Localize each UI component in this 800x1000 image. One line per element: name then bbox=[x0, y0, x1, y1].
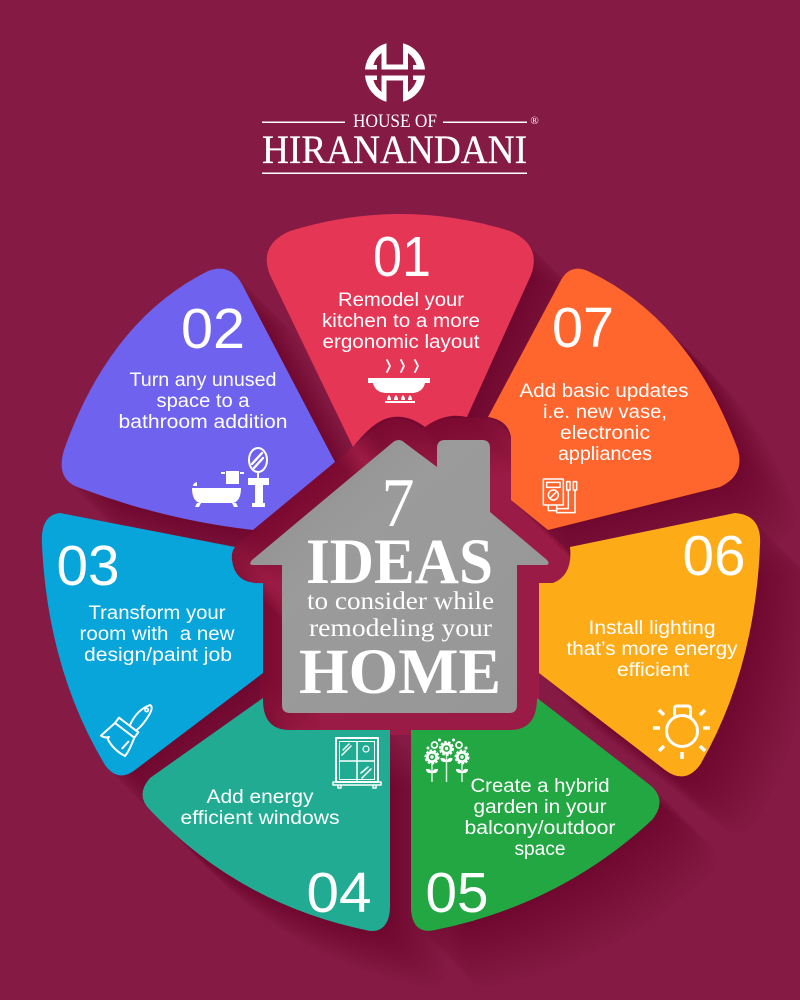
title: to consider while bbox=[307, 588, 494, 615]
title: IDEAS bbox=[306, 526, 493, 598]
segment 05: garden: Create a hybrid bbox=[470, 776, 610, 797]
logo: ® bbox=[530, 115, 539, 127]
title: 7 bbox=[382, 465, 414, 542]
icon: bathtub and sink bbox=[192, 448, 269, 507]
segment 05: garden: garden in your bbox=[474, 797, 607, 818]
segment 02: bathroom: space to a bbox=[156, 391, 250, 412]
segment 02: bathroom: Turn any unused bbox=[130, 370, 276, 391]
logo emblem bbox=[365, 43, 425, 102]
segment 04: windows bbox=[142, 698, 390, 931]
icon: pan on burner bbox=[368, 360, 430, 403]
segment 06: lighting bbox=[539, 513, 760, 776]
segment 07: updates: Add basic updates bbox=[520, 381, 688, 402]
segment 06: lighting: Install lighting bbox=[588, 618, 716, 639]
segment 05: garden: space bbox=[514, 839, 566, 860]
segment 01: kitchen bbox=[267, 214, 534, 447]
segment 02: bathroom: bathroom addition bbox=[118, 412, 288, 433]
segment 01: kitchen: kitchen to a more bbox=[322, 311, 480, 332]
segment 06: lighting: efficient bbox=[617, 660, 690, 681]
segment 03: room design: room with a new bbox=[80, 624, 235, 645]
segment 05: garden bbox=[411, 698, 660, 931]
segment 07: updates: electronic bbox=[560, 423, 650, 444]
house shape bbox=[250, 440, 549, 713]
icon: multimeter bbox=[543, 479, 577, 513]
long shadows of the segments bbox=[45, 217, 800, 987]
segment 04: windows: Add energy bbox=[206, 787, 314, 808]
segment 07: updates: appliances bbox=[558, 444, 652, 465]
segment 03: room design: 03 bbox=[56, 534, 120, 598]
segment 01: kitchen: ergonomic layout bbox=[322, 332, 480, 353]
segment 06: lighting: that’s more energy bbox=[566, 639, 738, 660]
segment 01: kitchen: 01 bbox=[373, 225, 431, 289]
segment 06: lighting: 06 bbox=[682, 524, 746, 588]
icon: flowers bbox=[426, 738, 468, 782]
title bbox=[299, 465, 501, 708]
segment 05: garden: 05 bbox=[426, 861, 488, 925]
house outline bbox=[250, 440, 549, 713]
segment 04: windows: efficient windows bbox=[180, 808, 340, 829]
segment 04: windows: 04 bbox=[306, 861, 372, 925]
icon: paint brush bbox=[101, 705, 152, 756]
segment 07: updates bbox=[488, 269, 740, 530]
logo: HIRANANDANI bbox=[262, 127, 527, 172]
segment 02: bathroom: 02 bbox=[181, 297, 245, 361]
logo: HOUSE OF bbox=[353, 111, 437, 132]
segment 07: updates: 07 bbox=[552, 296, 614, 360]
segment 03: room design bbox=[42, 513, 263, 775]
segment 01: kitchen: Remodel your bbox=[338, 290, 465, 311]
icon: window bbox=[333, 738, 381, 788]
title: HOME bbox=[299, 636, 501, 708]
icon: light bulb bbox=[653, 706, 710, 759]
logo bbox=[262, 43, 539, 174]
segment 07: updates: i.e. new vase, bbox=[543, 402, 667, 423]
segment 03: room design: Transform your bbox=[88, 603, 226, 624]
title: remodeling your bbox=[309, 615, 493, 642]
segment 05: garden: balcony/outdoor bbox=[464, 818, 616, 839]
segment 02: bathroom bbox=[62, 269, 335, 530]
segment 03: room design: design/paint job bbox=[84, 645, 232, 666]
